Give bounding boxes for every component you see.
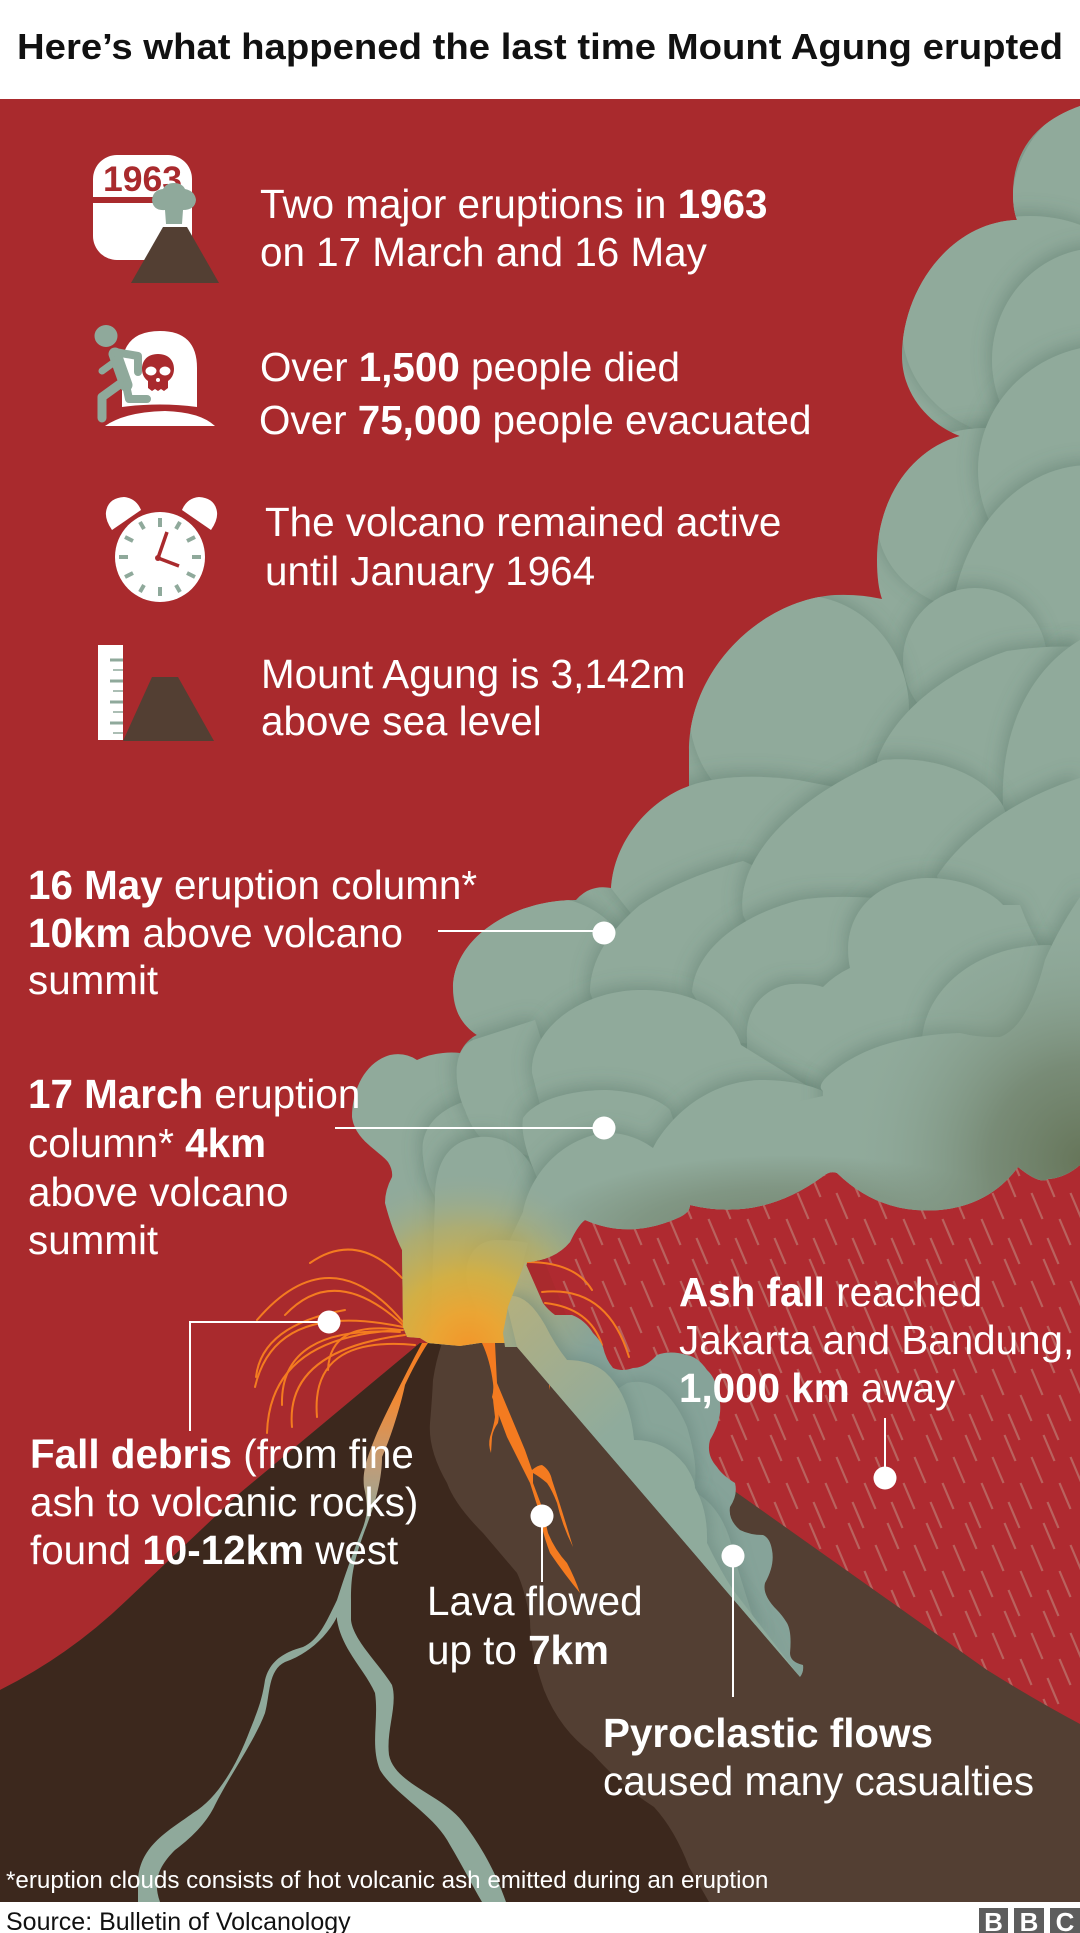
label: pyroclastic flows: caused many casualties [603, 1758, 1034, 1804]
label: ash fall: Jakarta and Bandung, [679, 1317, 1074, 1363]
label: 17 March column: summit [28, 1217, 158, 1263]
callout: lava marker [530, 1504, 554, 1582]
icon: calendar with volcano: 1963 [103, 159, 182, 199]
BBC logo [979, 1907, 1080, 1933]
ash rivers on left flank [138, 1343, 506, 1902]
label: 17 March column: column* 4km [28, 1120, 266, 1166]
callout: 17 March marker [335, 1116, 616, 1140]
text: height: above sea level [261, 698, 542, 744]
text: eruption dates: Two major eruptions in 1963 [260, 181, 767, 227]
title: Here’s what happened the last time Mount Agung erupted [17, 26, 1063, 67]
label: pyroclastic flows: Pyroclastic flows [603, 1710, 933, 1756]
label: 17 March column: above volcano [28, 1169, 288, 1215]
text: casualties: Over 75,000 people evacuated [259, 397, 811, 443]
icon: alarm clock [106, 497, 217, 602]
text: casualties: Over 1,500 people died [260, 344, 680, 390]
icon: calendar with volcano [93, 155, 219, 283]
label: lava: up to 7km [427, 1627, 609, 1673]
callout: pyroclastic marker [722, 1544, 744, 1697]
label: ash fall: 1,000 km away [679, 1365, 955, 1411]
ash fall hatched area [500, 1150, 1080, 1724]
text: eruption dates: on 17 March and 16 May [260, 229, 708, 275]
volcano [0, 1343, 1080, 1902]
label: 16 May column: 10km above volcano [28, 910, 403, 956]
icon: ruler and mountain [98, 645, 214, 741]
fall debris arcs [255, 1250, 629, 1433]
label: 17 March column: 17 March eruption [28, 1071, 360, 1117]
label: fall debris: found 10-12km west [30, 1527, 398, 1573]
label: 16 May column: 16 May eruption column* [28, 862, 477, 908]
text: activity duration: The volcano remained active [265, 499, 781, 545]
footnote: *eruption clouds consists of hot volcanic ash emitted during an eruption [6, 1867, 768, 1894]
callout: 16 May marker [438, 922, 616, 944]
eruption cloud [352, 106, 1080, 1346]
text: height: Mount Agung is 3,142m [261, 651, 685, 697]
callout: ash fall marker [874, 1418, 896, 1490]
callout: fall debris marker [189, 1310, 340, 1431]
label: fall debris: Fall debris (from fine [30, 1431, 414, 1477]
pyroclastic flow [503, 1262, 804, 1677]
label: 16 May column: summit [28, 957, 158, 1003]
text: activity duration: until January 1964 [265, 548, 595, 594]
icon: runner and gravestone [94, 325, 215, 426]
label: lava: Lava flowed [427, 1578, 643, 1624]
lava flow [482, 1343, 580, 1593]
label: fall debris: ash to volcanic rocks) [30, 1479, 418, 1525]
label: ash fall: Ash fall reached [679, 1269, 982, 1315]
